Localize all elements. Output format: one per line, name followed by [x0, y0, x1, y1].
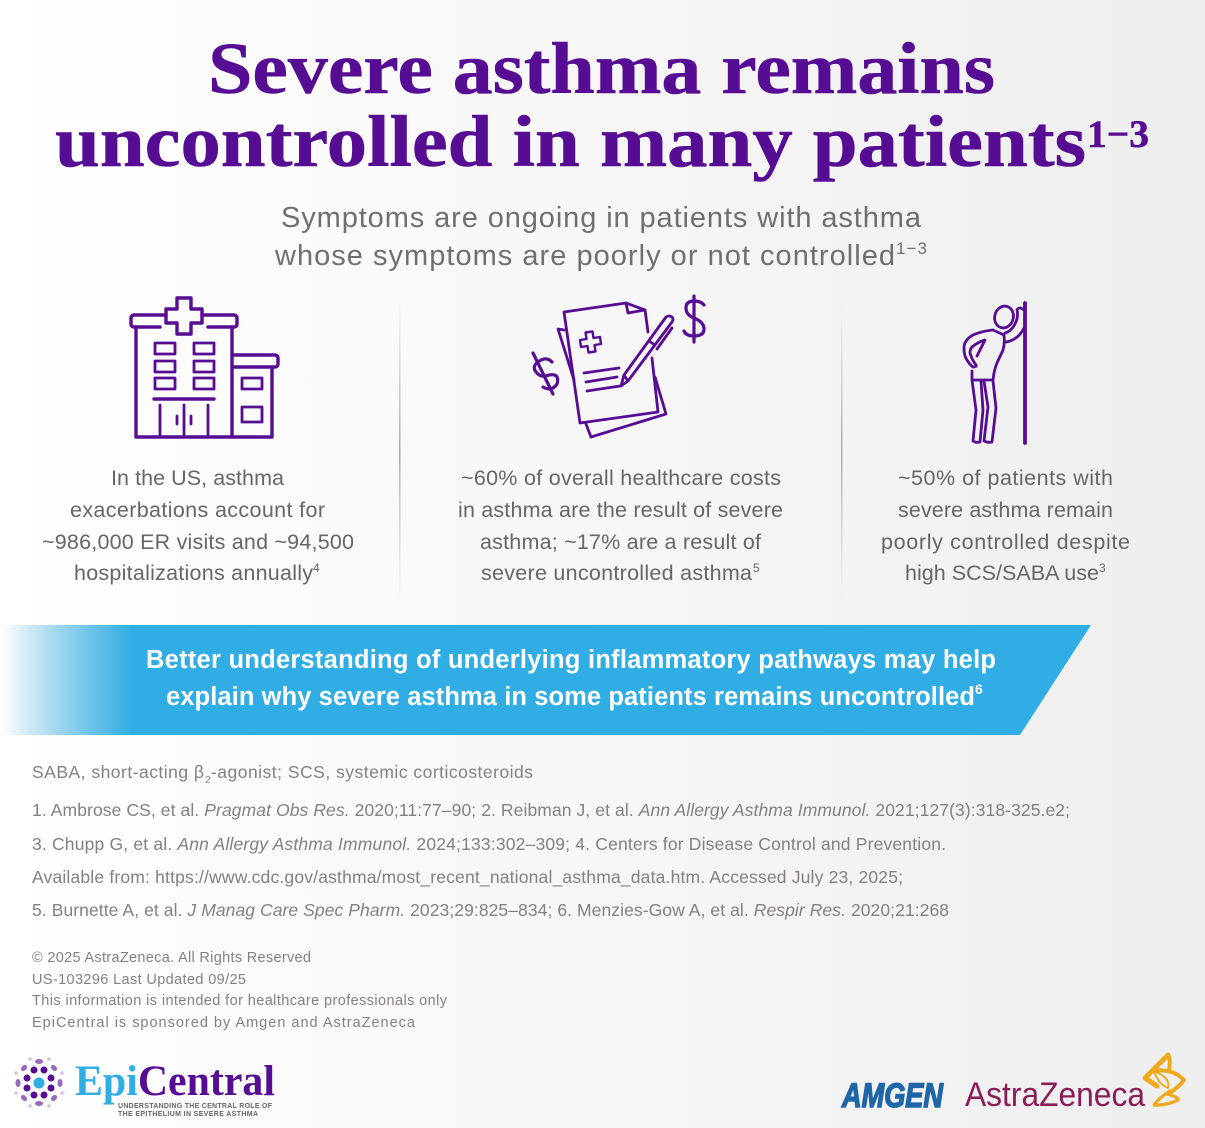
- text: poorly controlled statistic: [881, 466, 1130, 585]
- title: uncontrolled in many patients: [55, 101, 1086, 182]
- icon: AstraZeneca gold swirl: [1145, 1055, 1184, 1105]
- logo: EpiCentral: THE EPITHELIUM IN SEVERE ASTHMA: [118, 1111, 258, 1118]
- abbreviations: 2: [205, 775, 211, 786]
- text: poorly controlled statistic: 3: [1099, 561, 1106, 575]
- banner callout: explain why severe asthma in some patients remains uncontrolled: [166, 683, 975, 711]
- abbreviations: SABA, short-acting β: [32, 762, 204, 782]
- title: 1−3: [1087, 113, 1149, 156]
- icon: dollar sign left: [533, 353, 558, 394]
- legal notes: [32, 950, 448, 1031]
- references: 1. Ambrose CS, et al. Pragmat Obs Res. 2020;11:77–90; 2. Reibman J, et al. Ann Allergy Asthma Immunol. 2021;127(3):318-325.e2;: [32, 800, 1070, 820]
- icon: person leaning on wall: [964, 303, 1025, 443]
- icon: dotted sphere: [14, 1057, 64, 1108]
- text: ER visits statistic: hospitalizations annually: [74, 561, 313, 585]
- text: healthcare costs statistic: 5: [753, 561, 760, 575]
- logo: EpiCentral: UNDERSTANDING THE CENTRAL ROLE OF: [118, 1103, 273, 1110]
- subtitle: whose symptoms are poorly or not controlled: [274, 240, 895, 272]
- references: [32, 800, 1070, 920]
- icon: dollar sign right: [684, 296, 704, 342]
- subtitle: Symptoms are ongoing in patients with asthma: [281, 202, 922, 234]
- title: Severe asthma remains: [208, 28, 995, 109]
- icon: medical bills and pen with dollar signs: [533, 296, 704, 437]
- text: ER visits statistic: [42, 466, 354, 585]
- text: poorly controlled statistic: high SCS/SABA use: [905, 561, 1099, 585]
- abbreviations: [32, 762, 533, 786]
- text: poorly controlled statistic: poorly controlled despite: [881, 530, 1130, 554]
- subtitle: [274, 202, 927, 272]
- logo: AstraZeneca: AstraZeneca: [965, 1076, 1145, 1114]
- legal notes: © 2025 AstraZeneca. All Rights Reserved: [32, 950, 311, 966]
- legal notes: US-103296 Last Updated 09/25: [32, 972, 246, 988]
- text: healthcare costs statistic: [458, 466, 783, 585]
- text: healthcare costs statistic: ~60% of overall healthcare costs: [461, 466, 781, 490]
- references: Available from: https://www.cdc.gov/asthma/most_recent_national_asthma_data.htm. Accessed July 23, 2025;: [32, 867, 903, 888]
- logo: AstraZeneca: [965, 1055, 1184, 1114]
- text: ER visits statistic: 4: [313, 561, 320, 575]
- icon: hospital building: [131, 298, 278, 437]
- banner callout: [0, 625, 1091, 735]
- text: ER visits statistic: exacerbations account for: [70, 498, 325, 522]
- text: ER visits statistic: In the US, asthma: [111, 466, 284, 490]
- subtitle: 1−3: [896, 239, 927, 258]
- text: ER visits statistic: ~986,000 ER visits and ~94,500: [42, 530, 354, 554]
- text: poorly controlled statistic: ~50% of patients with: [898, 466, 1113, 490]
- title: [55, 28, 1149, 182]
- banner callout: 6: [975, 681, 983, 697]
- text: poorly controlled statistic: severe asthma remain: [898, 498, 1113, 522]
- legal notes: EpiCentral is sponsored by Amgen and AstraZeneca: [32, 1015, 416, 1031]
- text: healthcare costs statistic: severe uncontrolled asthma: [481, 561, 752, 585]
- text: healthcare costs statistic: asthma; ~17% are a result of: [480, 530, 761, 554]
- logo: Amgen: AMGEN: [841, 1077, 944, 1115]
- banner callout: Better understanding of underlying inflammatory pathways may help: [146, 646, 996, 674]
- legal notes: This information is intended for healthcare professionals only: [32, 993, 448, 1009]
- references: 3. Chupp G, et al. Ann Allergy Asthma Immunol. 2024;133:302–309; 4. Centers for Disease Control and Prevention.: [32, 834, 946, 854]
- logo: EpiCentral: EpiCentral: [75, 1058, 275, 1105]
- logo: EpiCentral: [14, 1057, 275, 1118]
- text: healthcare costs statistic: in asthma are the result of severe: [458, 498, 783, 522]
- references: 5. Burnette A, et al. J Manag Care Spec Pharm. 2023;29:825–834; 6. Menzies-Gow A, et al. Respir Res. 2020;21:268: [32, 900, 949, 920]
- abbreviations: -agonist; SCS, systemic corticosteroids: [211, 762, 533, 782]
- column dividers: [399, 300, 842, 600]
